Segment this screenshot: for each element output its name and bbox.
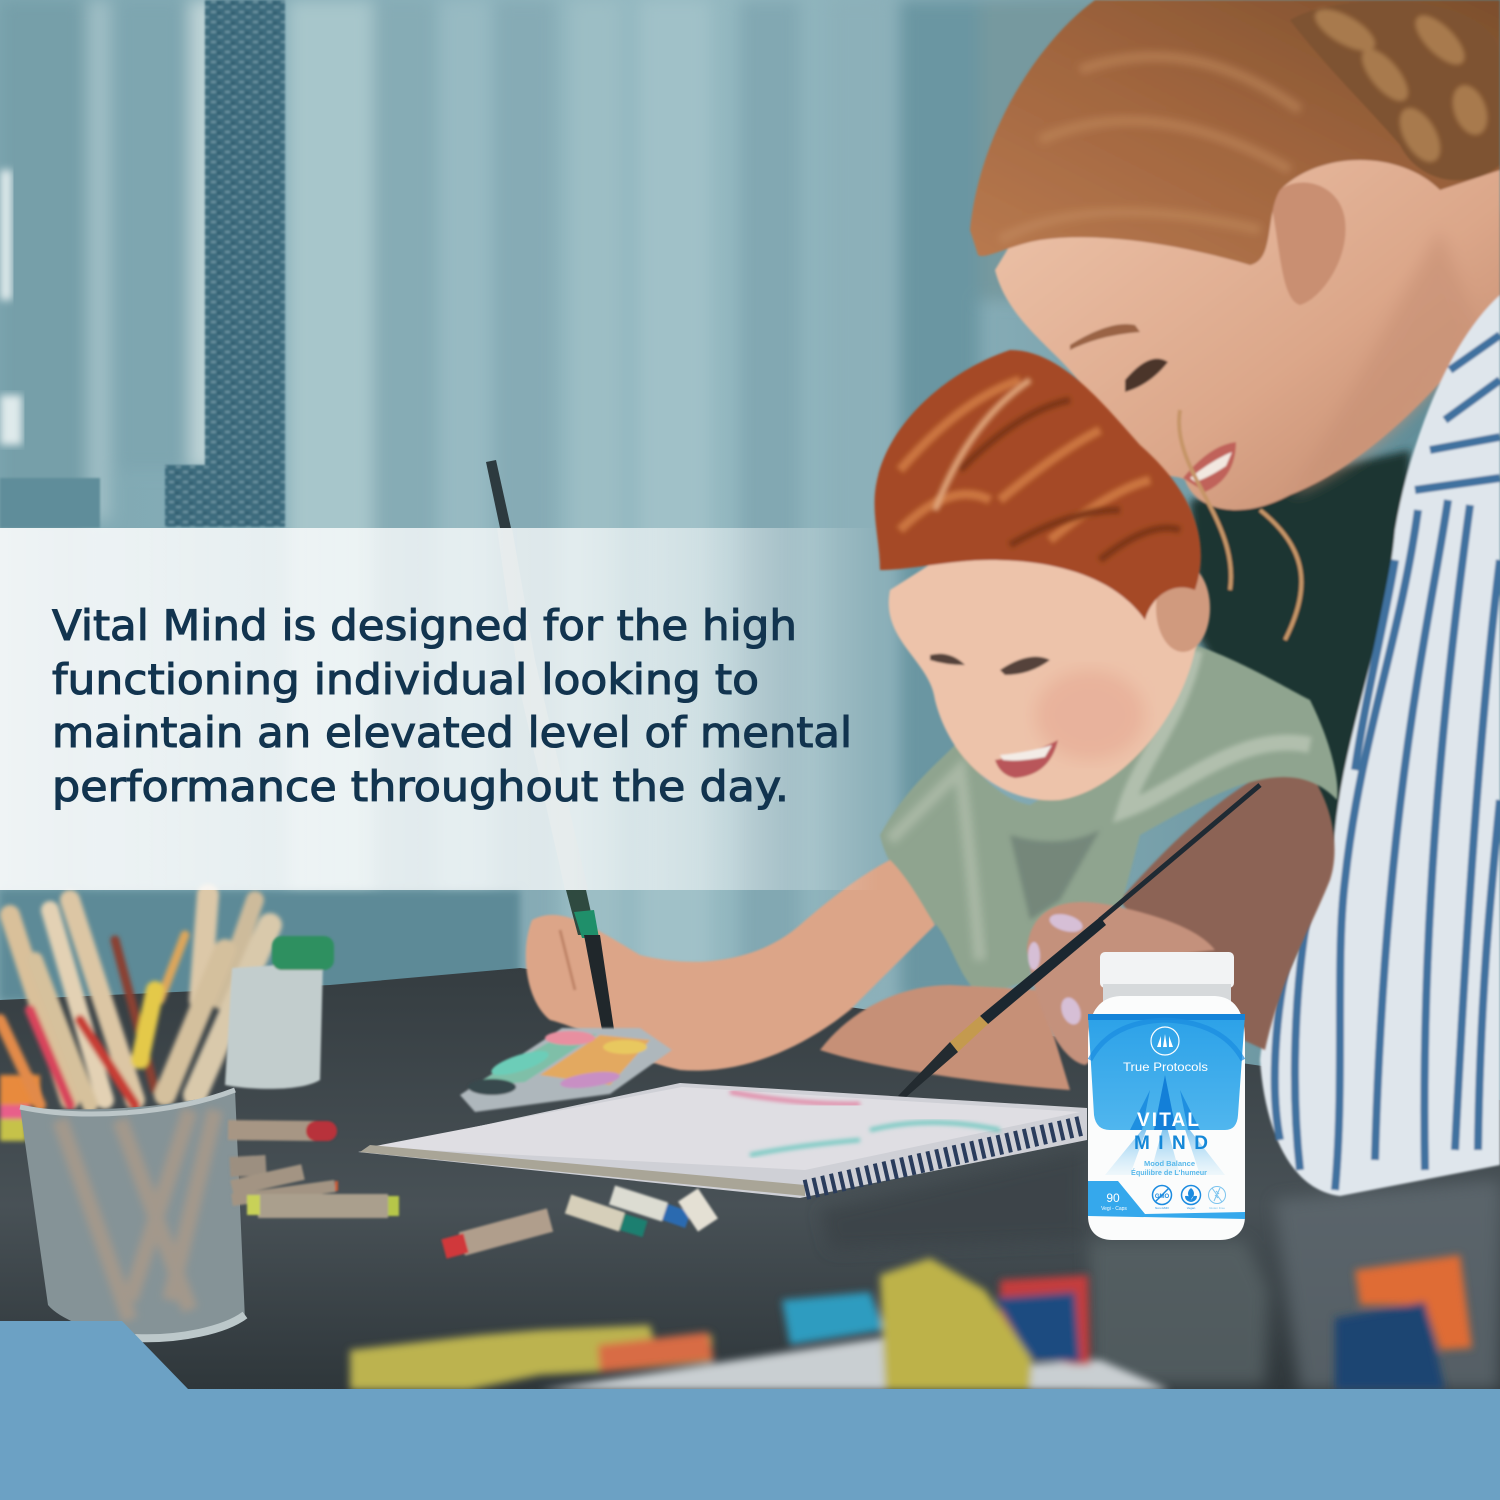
main statement text: performance throughout the day. <box>52 762 789 811</box>
icon: non-GMO: GMO <box>1155 1194 1169 1200</box>
woman's striped shirt <box>1260 295 1500 1196</box>
rays within panel <box>1154 1075 1176 1130</box>
product subtitle: Mood Balance <box>1144 1159 1195 1168</box>
label bottom band <box>1088 1181 1245 1219</box>
capsule count: 90 <box>1106 1191 1120 1205</box>
photo: woman's hand <box>1027 902 1215 1065</box>
photo: crayons <box>228 1130 708 1249</box>
photo: table reflections <box>820 1150 1500 1390</box>
photo: table <box>0 968 1500 1400</box>
photo: blurred blocks in foreground <box>350 1255 1472 1390</box>
rays below label panel <box>1105 1120 1150 1175</box>
photo: woman <box>970 0 1500 1196</box>
label arcs <box>1090 1020 1243 1060</box>
icon: vegan: Vegan <box>1187 1206 1196 1210</box>
girl's dress <box>880 645 1338 995</box>
girl's hair <box>875 350 1201 620</box>
photo: watercolor palette <box>460 1028 672 1112</box>
photo: notebook <box>358 1083 1087 1198</box>
girl's drawing arm <box>526 860 935 1071</box>
brand name: True Protocols <box>1123 1060 1208 1074</box>
product bottle: Vegi - Caps <box>1101 1206 1127 1212</box>
bottom blue band <box>0 1321 1500 1500</box>
product bottle <box>1088 952 1245 1240</box>
icon: gluten free <box>1208 1186 1226 1210</box>
icon: gluten free: Gluten Free <box>1209 1206 1225 1210</box>
photo: girl <box>526 350 1338 1090</box>
photo: water jar <box>225 936 334 1089</box>
product bottle: MIND <box>1134 1133 1208 1154</box>
main statement text: functioning individual looking to <box>52 655 759 704</box>
photo: coloured paper at left <box>0 1075 40 1141</box>
woman's face and neck <box>995 120 1500 510</box>
icon: non-GMO: Non-GMO <box>1155 1206 1169 1210</box>
label blue top panel <box>1088 1014 1245 1130</box>
main statement text <box>52 601 852 811</box>
icon: vegan <box>1182 1186 1200 1210</box>
bottle cap <box>1100 952 1234 988</box>
product bottle: Équilibre de L'humeur <box>1131 1168 1207 1177</box>
woman's braided bun <box>1290 1 1500 180</box>
bottle body <box>1088 996 1245 1240</box>
main statement text: Vital Mind is designed for the high <box>52 601 797 650</box>
photo: paint brushes <box>486 460 1260 1098</box>
translucent text panel <box>0 528 880 890</box>
girl's far arm <box>1120 760 1335 1050</box>
woman's hair <box>970 0 1500 265</box>
logo <box>1151 1027 1179 1055</box>
icon: non-GMO <box>1152 1186 1172 1210</box>
shadow area behind girl <box>1190 450 1410 860</box>
main statement text: maintain an elevated level of mental <box>52 708 852 757</box>
photo: pencil cup <box>0 895 270 1341</box>
woman's neck shadow <box>1290 230 1480 495</box>
product name: VITAL <box>1137 1110 1199 1131</box>
girl's face <box>889 520 1206 800</box>
photo background: curtain <box>0 0 1500 1200</box>
